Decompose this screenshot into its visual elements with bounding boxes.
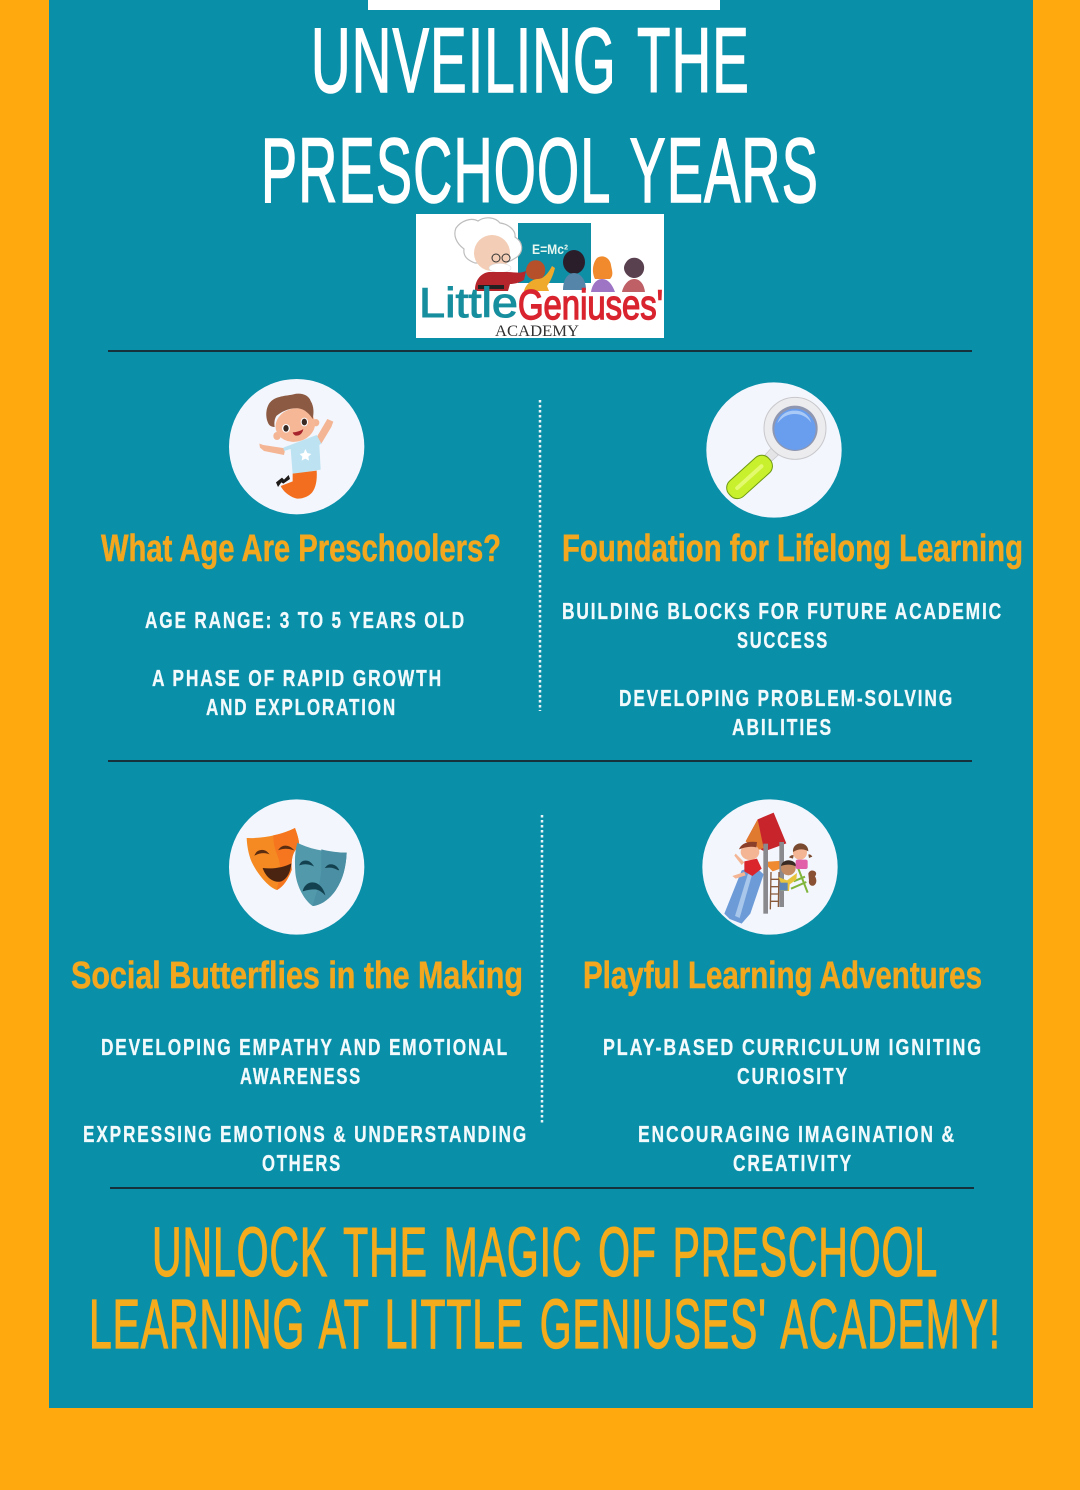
text block bbox=[562, 598, 1003, 740]
logo: Little Geniuses' Academy: ACADEMY bbox=[495, 323, 579, 340]
dotted separators bbox=[540, 400, 542, 1125]
heading: Social Butterflies in the Making bbox=[71, 955, 523, 997]
icon: jumping boy bbox=[229, 379, 364, 514]
panel: what age are preschoolers bbox=[101, 379, 501, 720]
logo: Little Geniuses' Academy bbox=[416, 214, 664, 340]
panel: social butterflies bbox=[71, 799, 528, 1176]
text block: DEVELOPING PROBLEM-SOLVING bbox=[619, 685, 954, 711]
text block: OTHERS bbox=[262, 1150, 342, 1176]
heading: What Age Are Preschoolers? bbox=[101, 528, 501, 570]
text block: DEVELOPING EMPATHY AND EMOTIONAL bbox=[101, 1034, 509, 1060]
logo: Little Geniuses' Academy: Little bbox=[419, 279, 518, 326]
text block bbox=[145, 607, 466, 720]
logo: Little Geniuses' Academy: Geniuses' bbox=[518, 281, 663, 328]
icon: theatre masks bbox=[229, 799, 364, 935]
icon: playground bbox=[702, 799, 838, 935]
text block: EXPRESSING EMOTIONS & UNDERSTANDING bbox=[83, 1121, 528, 1147]
panel: playful learning adventures bbox=[583, 799, 983, 1176]
text block: CURIOSITY bbox=[737, 1063, 849, 1089]
text block: ABILITIES bbox=[732, 714, 833, 740]
top white bar bbox=[368, 0, 720, 10]
text block: AWARENESS bbox=[240, 1063, 362, 1089]
call to action bbox=[89, 1213, 1001, 1363]
title: UNVEILING THE bbox=[311, 10, 750, 112]
text block bbox=[83, 1034, 528, 1176]
text block: AGE RANGE: 3 TO 5 YEARS OLD bbox=[145, 607, 466, 633]
text block: SUCCESS bbox=[737, 627, 829, 653]
text block: ENCOURAGING IMAGINATION & bbox=[638, 1121, 956, 1147]
text block: A PHASE OF RAPID GROWTH bbox=[152, 665, 443, 691]
title bbox=[261, 10, 819, 222]
panel: foundation for lifelong learning bbox=[562, 382, 1023, 740]
text block: CREATIVITY bbox=[733, 1150, 853, 1176]
icon: magnifying glass bbox=[706, 382, 842, 518]
divider lines bbox=[108, 351, 974, 1188]
logo: Little Geniuses' Academy: E=Mc² bbox=[532, 241, 568, 257]
text block bbox=[603, 1034, 983, 1176]
text block: AND EXPLORATION bbox=[206, 694, 397, 720]
